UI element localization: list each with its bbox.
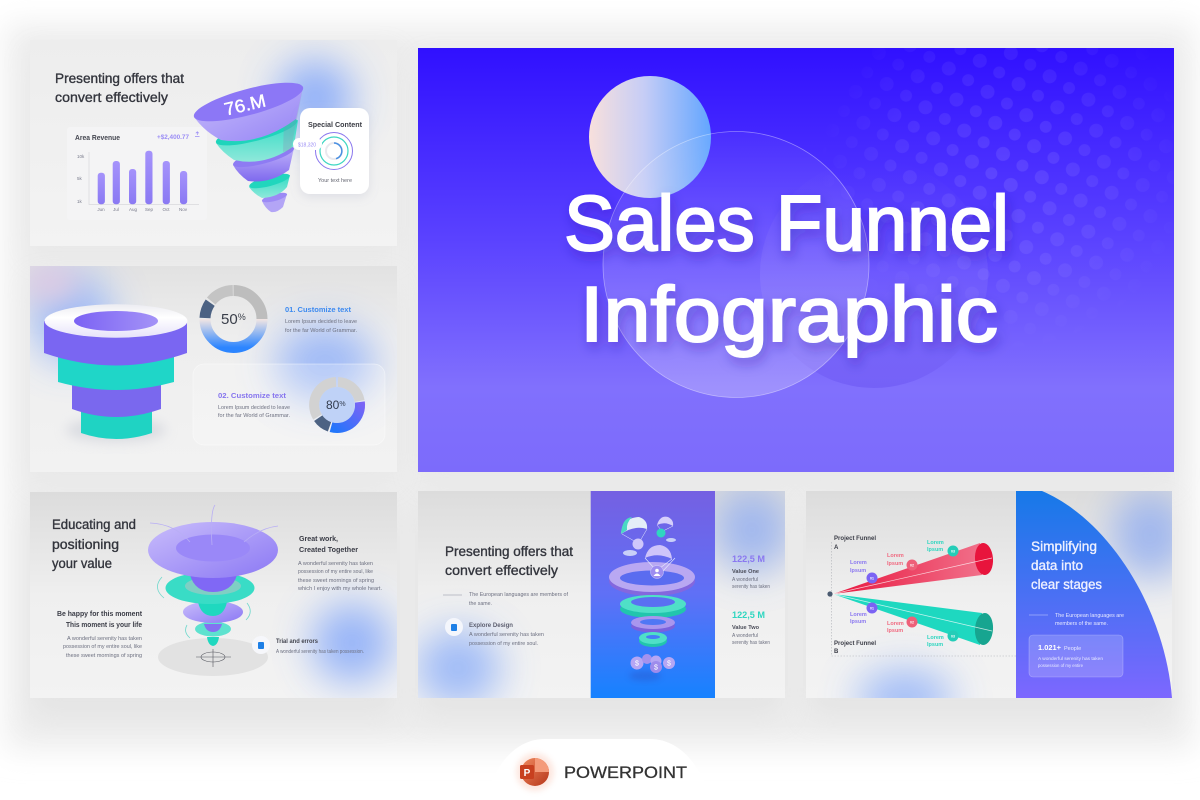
area revenue bar chart: +$2,400.77 [157,135,190,141]
heading: simplifying: clear stages [1031,577,1102,592]
parachute left [621,517,647,550]
special content card: $18,320 [298,142,316,148]
special content card: Your text here [318,178,352,184]
ring funnel with parachutes and coins [609,517,695,681]
icon: document [252,636,270,654]
layered disc funnel [148,505,278,646]
stage markers and lorem labels: 03 [951,634,955,638]
area revenue bar chart: 5k [77,176,83,181]
text: be happy: A wonderful serenity has taken [67,636,142,642]
stat: value one: 122,5 M [732,554,765,564]
panel: parachute funnel slide [416,488,790,706]
text: european languages [443,592,568,605]
3D funnel with 76.M: 76.M [222,91,268,119]
area revenue bar chart: 1k [77,199,83,204]
title: Sales Funnel [564,179,1009,267]
stat: value one: serenity has taken [732,584,770,590]
stage markers and lorem labels: Ipsum [927,642,943,648]
stage markers and lorem labels: Lorem [927,635,944,641]
coins: $ [667,660,671,668]
circle: front glass [603,132,869,398]
panel: project funnel comparison slide [806,491,1188,726]
heading: presenting offers: Presenting offers that [445,544,573,559]
text: 01 customize text: Lorem Ipsum decided to leave [285,319,357,325]
area revenue bar chart [75,131,200,212]
text: 01 customize text [285,307,357,334]
heading: educating: positioning [52,537,119,552]
funnel labels [834,536,876,655]
parachute right [623,517,676,556]
hero panel: Sales Funnel Infographic [418,48,1174,472]
powerpoint badge [485,739,712,800]
stage markers and lorem labels [850,540,958,648]
stat: value two: 122,5 M [732,610,765,620]
quarter circle gradient panel [1016,491,1172,698]
icon: powerpoint logo [516,753,554,791]
glass card with 02 customize text: 02. Customize text [218,393,287,400]
heading: simplifying [1031,539,1102,592]
text: european languages: The European languages are [1055,613,1124,619]
heading: educating: Educating and [52,517,136,532]
donut chart 50 percent [205,290,262,348]
text: trial and errors: A wonderful serenity has taken possession. [276,649,364,655]
donut chart 50 percent: 50 [221,311,238,328]
stage markers and lorem labels: Ipsum [850,619,866,625]
title: Infographic [580,270,998,358]
area revenue bar chart: Jun [97,207,105,212]
heading: presenting offers: convert effectively [445,563,558,578]
area revenue bar chart: Sep [145,207,153,212]
text: be happy: possession of my entire soul, like [63,644,142,650]
target ground shadow [158,638,268,676]
stacked cylinder funnel [44,304,188,439]
stage markers and lorem labels: Ipsum [887,561,903,567]
stat card: people: possession of my entire [1038,663,1083,668]
third ring [631,624,675,632]
fourth ring [639,640,667,647]
funnel labels: B [834,649,839,655]
stat: value two [732,610,770,646]
powerpoint badge: POWERPOINT [564,763,687,782]
area revenue bar chart: Aug [129,207,137,212]
stage markers and lorem labels: Ipsum [927,547,943,553]
panel: customize text slide [20,262,397,472]
text: great work: A wonderful serenity has taken [298,561,373,567]
area revenue bar chart: Area Revenue [75,135,120,142]
heading: educating: your value [52,556,112,571]
text: european languages: The European languages are members of [469,592,569,598]
text: explore design [469,623,544,647]
donut chart 80 percent: 80 [326,398,339,412]
stage markers and lorem labels: 03 [951,550,955,554]
text: european languages: the same. [469,601,492,607]
area revenue bar chart: Nov [179,207,188,212]
stat: value two: serenity has taken [732,640,770,646]
stat card: people: People [1064,646,1081,652]
special content card: Special Content [308,122,363,129]
stage markers and lorem labels: 02 [910,564,914,568]
stage markers and lorem labels: Lorem [887,621,904,627]
area revenue bar chart: Jul [113,207,119,212]
text: explore design: possession of my entire soul. [469,641,538,647]
stat: value one: Value One [732,569,759,575]
text: explore design: Explore Design [469,623,513,629]
center gradient strip [591,491,715,698]
coins: $ [654,664,658,672]
stage markers and lorem labels: Lorem [850,560,867,566]
dashed axes [832,542,1016,656]
text: be happy: Be happy for this moment [57,611,143,618]
stage markers and lorem labels: 01 [870,576,874,580]
text: european languages [1029,613,1124,627]
second ring [620,606,686,618]
stage markers and lorem labels: Lorem [927,540,944,546]
text: 01 customize text: 01. Customize text [285,307,352,314]
panel: presenting offers slide [30,40,397,246]
glass card with 02 customize text [193,364,386,417]
text: great work [298,536,382,592]
text: great work: Created Together [299,547,358,554]
text: great work: Great work, [299,536,338,543]
stage markers and lorem labels: 01 [870,606,874,610]
stage markers and lorem labels: Ipsum [850,568,866,574]
circle: pastel gradient [589,76,711,198]
stat card: people: 1.021+ [1038,643,1062,652]
heading: simplifying: data into [1031,558,1083,573]
heading: educating [52,517,136,571]
special content card [293,108,369,194]
heading: presenting offers [445,544,573,578]
panel: educating and positioning slide [30,492,397,698]
stage markers and lorem labels: Lorem [850,612,867,618]
stage markers and lorem labels: Ipsum [887,628,903,634]
text: be happy: these sweet mornings of spring [66,653,142,659]
area revenue bar chart: 10k [77,154,85,159]
stat card: people: A wonderful serenity has taken [1038,656,1104,661]
glass card with 02 customize text: Lorem Ipsum decided to leave [218,405,290,411]
text: great work: which I enjoy with my whole heart. [298,586,382,592]
3D funnel with 76.M [194,82,304,212]
text: be happy [57,611,143,659]
stage markers and lorem labels: Lorem [887,553,904,559]
heading: presenting offers: Presenting offers that [55,71,184,86]
apex dot [827,591,833,597]
icon: powerpoint logo: P [524,768,531,779]
stat: value two: A wonderful [732,633,758,639]
text: explore design: A wonderful serenity has taken [469,632,544,638]
coins: $ [635,660,639,668]
text: 01 customize text: for the far World of Grammar. [285,328,357,334]
stat: value one: A wonderful [732,577,758,583]
glass card with 02 customize text: for the far World of Grammar. [218,413,290,419]
parachute center [645,545,675,578]
text: great work: possession of my entire soul, like [298,569,373,575]
icon: explore design [445,618,463,636]
stat: value two: Value Two [732,625,760,631]
donut chart 80 percent [314,382,360,428]
donut chart 50 percent: % [238,312,246,322]
coins [629,654,675,681]
text: great work: these sweet mornings of spring [298,578,374,584]
red cone funnel A [833,542,994,594]
heading: simplifying: Simplifying [1031,539,1097,554]
donut chart 80 percent: % [339,401,346,408]
text: european languages: members of the same. [1055,621,1108,627]
stage markers and lorem labels: 02 [910,620,914,624]
stat: value one [732,554,770,590]
funnel labels: A [834,545,839,551]
text: be happy: This moment is your life [66,622,142,629]
stat card: people [1029,635,1123,677]
heading: presenting offers: convert effectively [55,90,168,105]
circle: rear glass [760,240,988,388]
top funnel ring [609,579,695,596]
text: trial and errors: Trial and errors [276,639,319,645]
teal cone funnel B [833,594,994,646]
area revenue bar chart: Oct [162,207,170,212]
heading: presenting offers [55,71,184,105]
funnel labels: Project Funnel [834,641,876,647]
text: trial and errors [276,639,364,655]
funnel labels: Project Funnel [834,536,876,542]
title [564,179,1009,358]
